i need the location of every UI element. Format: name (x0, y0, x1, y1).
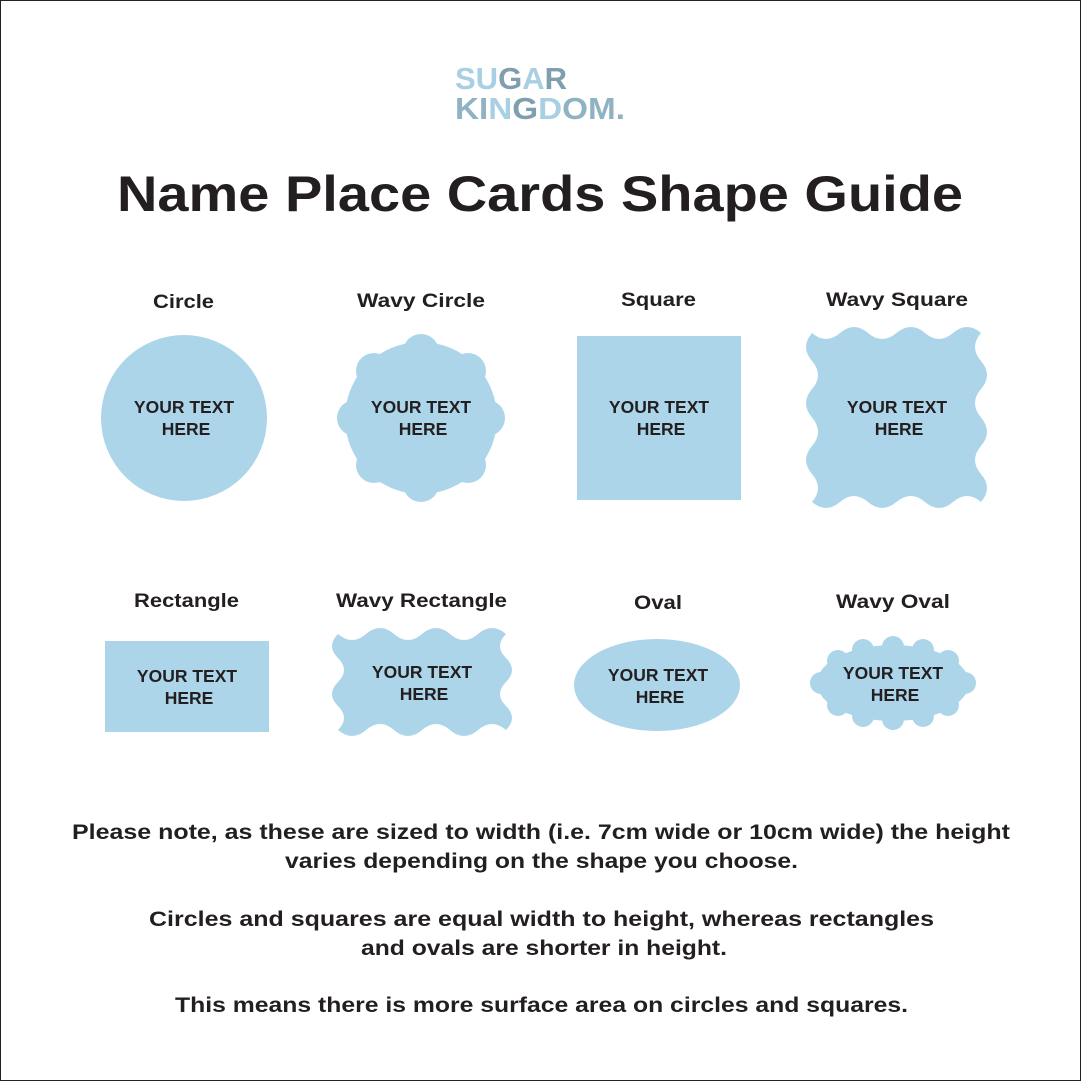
label: wavy circle: Wavy Circle (357, 291, 485, 312)
card text: square: HERE (637, 419, 685, 439)
title: Name Place Cards Shape Guide (117, 166, 963, 222)
card text: oval: YOUR TEXT (608, 665, 708, 685)
note text: Circles and squares are equal width to height, whereas rectangles (149, 908, 934, 931)
label: wavy rectangle: Wavy Rectangle (336, 591, 507, 612)
shape: wavy circle (337, 334, 505, 502)
shape: square (577, 336, 741, 500)
label: square: Square (621, 290, 696, 311)
shape: rectangle (105, 641, 269, 732)
shape: circle (101, 335, 267, 501)
card text: square: YOUR TEXT (609, 397, 709, 417)
card text: wavy square: YOUR TEXT (847, 397, 947, 417)
card text: wavy rectangle: HERE (400, 684, 448, 704)
card text: wavy square: HERE (875, 419, 923, 439)
label: oval: Oval (634, 593, 682, 614)
note text: and ovals are shorter in height. (361, 937, 727, 960)
note text: This means there is more surface area on circles and squares. (175, 994, 908, 1017)
logo: KINGDOM. (455, 91, 625, 126)
label: circle: Circle (153, 292, 214, 313)
logo (455, 61, 625, 126)
note text: varies depending on the shape you choose. (285, 850, 798, 873)
label: wavy square: Wavy Square (826, 290, 968, 311)
card text: circle: HERE (162, 419, 210, 439)
logo: SUGAR (455, 61, 567, 96)
shape: wavy oval (810, 636, 976, 730)
card text: rectangle: HERE (165, 688, 213, 708)
card text: wavy oval: YOUR TEXT (843, 663, 943, 683)
card text: wavy circle: YOUR TEXT (371, 397, 471, 417)
note text (72, 821, 1010, 1017)
card text: wavy circle: HERE (399, 419, 447, 439)
shape: oval (574, 639, 740, 731)
card text: oval: HERE (636, 687, 684, 707)
label: rectangle: Rectangle (134, 591, 239, 612)
shape: wavy square (806, 327, 987, 508)
card text: rectangle: YOUR TEXT (137, 666, 237, 686)
card text: circle: YOUR TEXT (134, 397, 234, 417)
card text: wavy rectangle: YOUR TEXT (372, 662, 472, 682)
note text: Please note, as these are sized to width (i.e. 7cm wide or 10cm wide) the height (72, 821, 1010, 844)
shape: wavy rectangle (332, 628, 512, 736)
card text: wavy oval: HERE (871, 685, 919, 705)
label: wavy oval: Wavy Oval (836, 592, 950, 613)
